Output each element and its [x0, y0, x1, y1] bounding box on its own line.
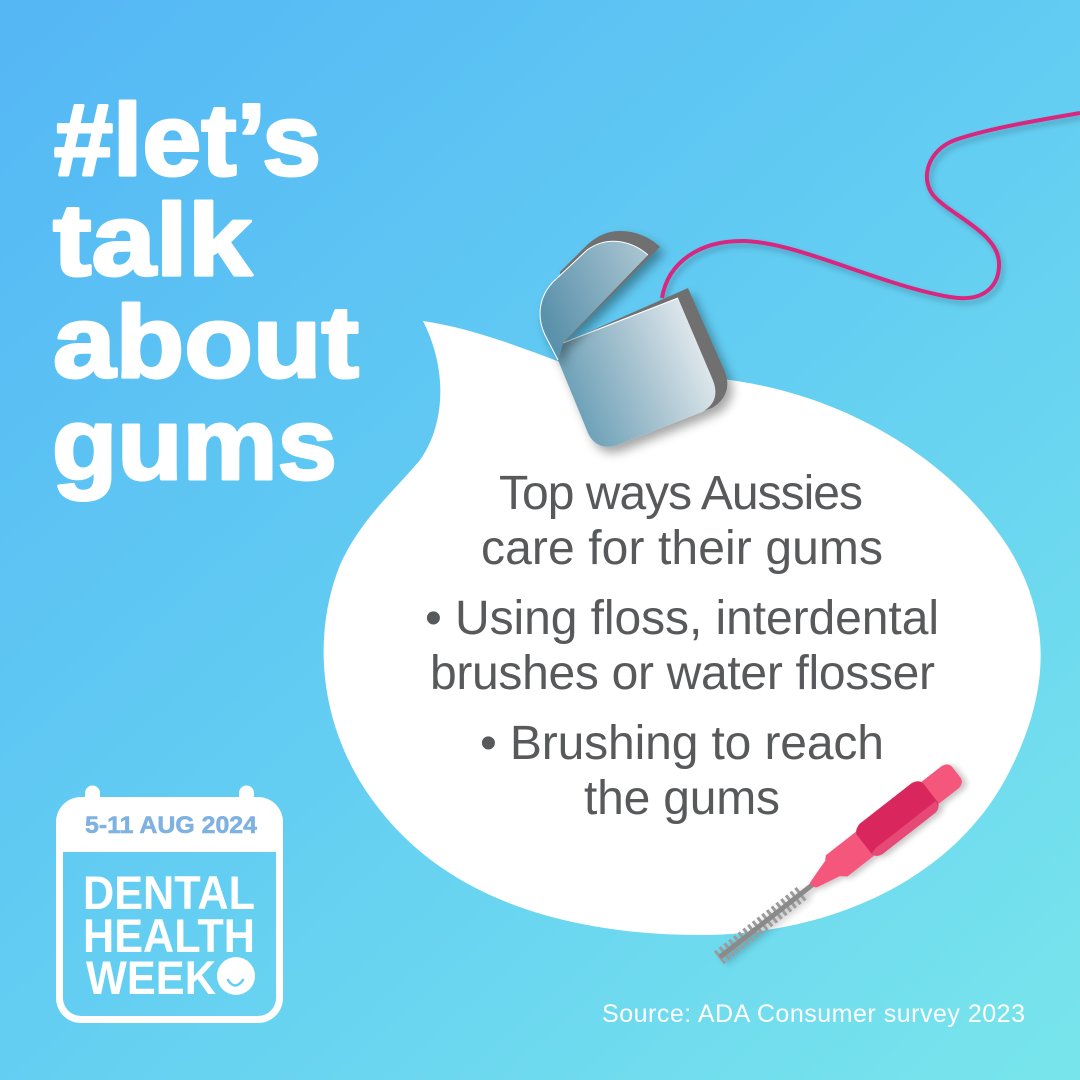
- wire: [718, 881, 816, 959]
- title: [52, 83, 359, 501]
- floss box: [540, 231, 727, 447]
- bullet 2: • Brushing to reach: [480, 717, 884, 770]
- title: #let’s: [54, 83, 321, 197]
- heading line 2: care for their gums: [481, 522, 883, 575]
- title: talk: [53, 183, 252, 297]
- health: HEALTH: [83, 909, 255, 962]
- grip: [853, 777, 943, 859]
- source: Source: ADA Consumer survey 2023: [602, 1000, 1025, 1028]
- calendar logo: [56, 786, 283, 1023]
- smile: [217, 957, 255, 995]
- title: gums: [52, 387, 337, 501]
- tip and neck: [802, 831, 876, 897]
- bullet 1 continued: brushes or water flosser: [430, 647, 935, 700]
- bristles: [715, 888, 805, 963]
- heading line 1: Top ways Aussies: [499, 467, 863, 520]
- floss thread: [662, 113, 1080, 298]
- bullet 2 continued: the gums: [584, 772, 780, 825]
- dates: 5-11 AUG 2024: [85, 812, 258, 839]
- interdental brush: [708, 757, 968, 972]
- week: WEEK: [86, 951, 216, 1004]
- calendar frame: [56, 786, 283, 1023]
- box base: [558, 288, 727, 447]
- grip shading: [870, 801, 941, 859]
- handle end: [922, 761, 965, 804]
- dental: DENTAL: [83, 866, 255, 919]
- box lid: [540, 231, 660, 360]
- bullet 1: • Using floss, interdental: [425, 592, 939, 645]
- speech bubble: [324, 321, 1041, 935]
- body text: [425, 467, 939, 825]
- title: about: [53, 285, 359, 399]
